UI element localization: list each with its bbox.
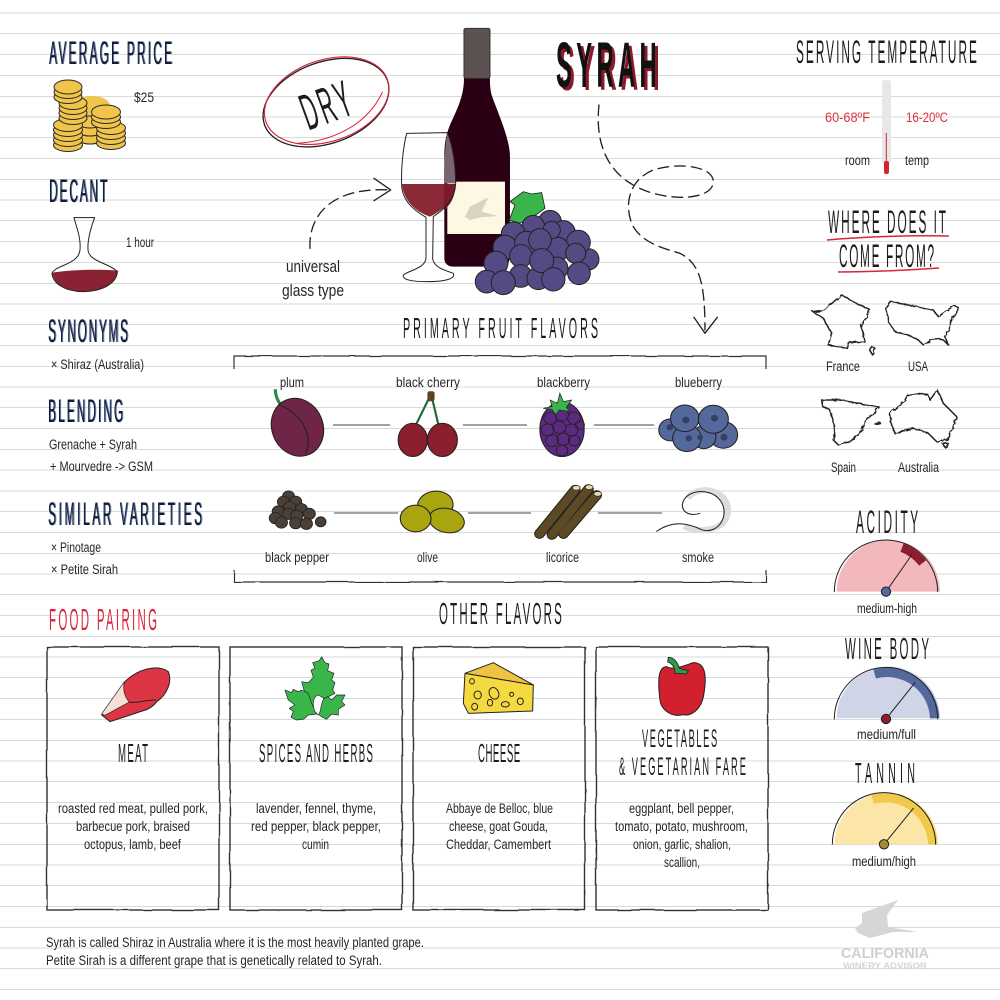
glass type label: glass type — [282, 281, 344, 300]
flavor: blueberry: blueberry — [675, 375, 722, 390]
panel: cheese — [413, 647, 585, 910]
blending text: + Mourvedre -> GSM — [50, 459, 153, 474]
map: usa: USA — [908, 359, 928, 374]
text: meat pairings — [58, 801, 208, 852]
heading: primary fruit flavors: PRIMARY FRUIT FLAVORS — [403, 311, 598, 345]
temperature celsius: 16-20ºC — [906, 110, 948, 125]
icon: thermometer — [882, 80, 891, 174]
heading: spices and herbs: SPICES AND HERBS — [259, 739, 373, 769]
bracket: bottom of flavors — [234, 570, 766, 582]
gauge: wine body — [834, 667, 940, 724]
heading: blending: BLENDING — [49, 394, 124, 430]
icon: steak — [102, 668, 170, 722]
footnote: Petite Sirah is a different grape that is genetically related to Syrah. — [46, 953, 382, 968]
similar varieties list — [51, 540, 118, 577]
heading: other flavors: OTHER FLAVORS — [439, 596, 562, 631]
heading: wine body: WINE BODY — [845, 631, 929, 666]
connector — [334, 512, 398, 514]
map: spain — [822, 400, 880, 475]
map: france — [813, 295, 875, 374]
illustration: wine bottle — [444, 28, 510, 267]
heading: cheese: CHEESE — [478, 739, 520, 769]
sweetness badge: dry: DRY — [293, 70, 359, 142]
text: vegetables list: eggplant, bell pepper, — [629, 801, 734, 816]
heading: similar varieties: SIMILAR VARIETIES — [48, 497, 202, 533]
map: usa — [887, 302, 958, 374]
heading: vegetables: VEGETABLES — [642, 724, 717, 752]
temperature fahrenheit: 60-68ºF — [825, 110, 870, 125]
synonym list: × Shiraz (Australia) — [51, 357, 144, 372]
text: vegetables list — [615, 801, 748, 870]
text: meat pairings: octopus, lamb, beef — [84, 837, 181, 852]
text: meat pairings: barbecue pork, braised — [76, 819, 190, 834]
heading: decant: DECANT — [49, 174, 107, 210]
icon: bell pepper — [659, 657, 705, 715]
text: vegetables list: onion, garlic, shalion, — [633, 837, 731, 852]
map: france: France — [826, 359, 860, 374]
heading: synonyms: SYNONYMS — [48, 314, 128, 350]
title: syrah: SYRAH — [556, 30, 657, 102]
text: spices list — [251, 801, 381, 852]
flavor: smoke — [656, 490, 728, 565]
text: cheese list: cheese, goat Gouda, — [449, 819, 548, 834]
flavor: plum — [264, 375, 331, 462]
flavor: smoke: smoke — [682, 550, 714, 565]
flavor: licorice — [540, 485, 602, 565]
flavor: blueberry — [659, 375, 738, 452]
heading: where does it come from: WHERE DOES IT — [828, 205, 946, 241]
glass type label — [282, 257, 344, 300]
heading: similar varieties: SIMILAR VARIETIES — [49, 497, 203, 533]
heading: synonyms: SYNONYMS — [49, 314, 129, 350]
flavor: olive — [400, 489, 467, 565]
panel: spices and herbs — [230, 647, 402, 910]
icon: coin stacks — [54, 80, 126, 152]
flavor: licorice: licorice — [546, 550, 579, 565]
decant time text: 1 hour — [126, 235, 154, 250]
heading: blending: BLENDING — [48, 394, 123, 430]
text: vegetables list: tomato, potato, mushroom, — [615, 819, 748, 834]
flavor: black pepper — [265, 491, 329, 565]
connector — [598, 512, 662, 514]
blending text: Grenache + Syrah — [49, 437, 137, 452]
illustration: grapes with leaf — [475, 192, 599, 295]
connector — [333, 424, 390, 426]
heading: meat: MEAT — [118, 739, 148, 769]
gauge: tannin — [832, 793, 938, 849]
text: spices list: red pepper, black pepper, — [251, 819, 381, 834]
logo: california winery advisor — [841, 900, 929, 970]
map: australia — [889, 390, 957, 475]
footnote — [46, 935, 424, 968]
connector — [468, 512, 531, 514]
bracket: top of flavors — [234, 356, 766, 369]
heading: acidity: ACIDITY — [856, 505, 918, 541]
flavor: blackberry — [537, 375, 590, 457]
flavor: black cherry — [396, 375, 460, 457]
text: spices list: cumin — [302, 837, 329, 852]
gauge label: acidity: medium-high — [857, 601, 917, 616]
heading: serving temperature: SERVING TEMPERATURE — [796, 35, 977, 71]
icon: parsley — [285, 657, 345, 720]
heading: food pairing: FOOD PAIRING — [49, 602, 157, 637]
connector — [594, 424, 654, 426]
heading: average price: AVERAGE PRICE — [50, 36, 173, 72]
arrow: dashed to glass — [310, 178, 391, 248]
flavor: blackberry: blackberry — [537, 375, 590, 390]
footnote: Syrah is called Shiraz in Australia where it is the most heavily planted grape. — [46, 935, 424, 950]
map: australia: Australia — [898, 460, 939, 475]
gauge label: tannin: medium/high — [852, 854, 916, 869]
heading: decant: DECANT — [50, 174, 108, 210]
logo: california winery advisor: CALIFORNIA — [841, 945, 929, 962]
heading: where does it come from: COME FROM? — [839, 239, 934, 275]
heading: tannin: TANNIN — [855, 756, 915, 790]
connector — [463, 424, 527, 426]
flavor: plum: plum — [280, 375, 304, 390]
panel: meat — [47, 647, 219, 910]
blending text — [49, 437, 153, 474]
logo: california winery advisor: WINERY ADVISOR — [843, 960, 927, 970]
gauge label: wine body: medium/full — [857, 727, 916, 742]
sweetness badge: dry — [251, 41, 401, 163]
price text: $25 — [134, 90, 154, 105]
similar varieties list: × Pinotage — [51, 540, 101, 555]
heading: where does it come from — [827, 205, 949, 275]
text: cheese list — [446, 801, 553, 852]
similar varieties list: × Petite Sirah — [51, 562, 118, 577]
text: vegetables list: scallion, — [664, 855, 700, 870]
heading: vegetarian fare: & VEGETARIAN FARE — [619, 752, 746, 780]
glass type label: universal — [286, 257, 340, 276]
text: meat pairings: roasted red meat, pulled pork, — [58, 801, 208, 816]
room label: room — [845, 153, 870, 168]
text: cheese list: Abbaye de Belloc, blue — [446, 801, 553, 816]
gauge: acidity — [834, 540, 940, 596]
icon: cheese wedge — [463, 663, 533, 713]
panel: vegetables — [596, 647, 768, 910]
arrow: dashed looping to flavors — [598, 105, 717, 333]
heading: average price: AVERAGE PRICE — [49, 36, 172, 72]
text: spices list: lavender, fennel, thyme, — [256, 801, 376, 816]
text: cheese list: Cheddar, Camembert — [446, 837, 551, 852]
temp label: temp — [905, 153, 929, 168]
title: syrah: SYRAH — [559, 33, 660, 105]
flavor: black cherry: black cherry — [396, 375, 460, 390]
illustration: wine glass — [402, 133, 456, 282]
flavor: olive: olive — [417, 550, 438, 565]
icon: decanter — [52, 218, 118, 292]
flavor: black pepper: black pepper — [265, 550, 329, 565]
map: spain: Spain — [831, 460, 856, 475]
